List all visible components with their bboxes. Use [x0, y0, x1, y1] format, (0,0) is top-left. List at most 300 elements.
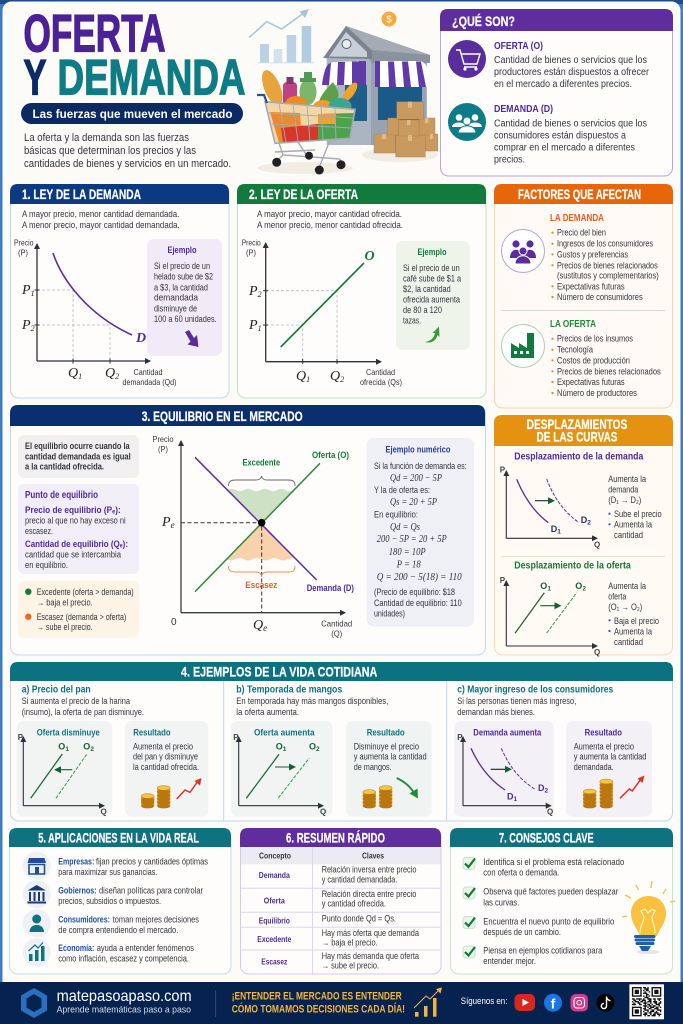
example c: c) Mayor ingreso de los consumidores — [457, 684, 613, 696]
intro text: cantidades de bienes y servicios en un mercado. — [24, 158, 231, 170]
text: supply shift effects: (O₁ → O₂) — [608, 602, 642, 612]
callout: ejemplo oferta — [396, 241, 470, 350]
summary table: Excedente — [257, 934, 291, 944]
heading: desplazamientos: DE LAS CURVAS — [536, 428, 618, 444]
chart: demand curve: P — [22, 283, 31, 298]
chart: oferta disminuye: 1 — [65, 746, 69, 753]
chart: demand shift: D — [551, 524, 557, 534]
text: oferta: Cantidad de bienes o servicios que los — [494, 55, 647, 66]
panel: 2 ley de la oferta — [237, 184, 486, 398]
summary table: Punto donde Qd = Qs. — [322, 914, 396, 924]
icon: coins — [141, 786, 170, 808]
chart: demanda aumenta: 1 — [514, 796, 518, 803]
summary table: Hay más demanda que oferta — [322, 951, 419, 961]
callout: ejemplo numerico: Qs = 20 + 5P — [390, 497, 437, 508]
chart: oferta aumenta: O — [309, 742, 316, 752]
text box: punto de equilibrio: cantidad que se intercambia — [25, 550, 121, 560]
application: consumidores: toman mejores decisiones — [113, 914, 199, 924]
factors: oferta: Expectativas futuras — [557, 377, 625, 387]
summary table — [257, 851, 419, 971]
chart: supply line: (P) — [246, 248, 256, 258]
chart: oferta aumenta: Oferta aumenta — [254, 727, 315, 738]
example b: En temporada hay más mangos disponibles, — [236, 696, 388, 706]
text: demanda — [494, 104, 647, 166]
icon: red rising arrow — [620, 776, 644, 798]
text box: punto de equilibrio: precio al que no hay exceso ni — [25, 516, 126, 526]
title: OFERTA — [24, 4, 166, 64]
text: demand shift effects: Sube el precio — [614, 509, 662, 519]
tips list: después de un cambio. — [483, 927, 561, 937]
chart: oferta disminuye: Q — [100, 807, 107, 816]
heading: 6: 6. RESUMEN RÁPIDO — [286, 829, 385, 845]
illustration: shopping cart with groceries — [257, 67, 360, 174]
summary table: Claves — [362, 851, 384, 861]
heading: 5: 5. APLICACIONES EN LA VIDA REAL — [38, 829, 199, 845]
text: demand shift effects: demanda — [608, 484, 638, 494]
summary table: Escasez — [261, 956, 287, 966]
chart: supply line: P — [249, 284, 258, 299]
logo — [21, 988, 47, 1018]
chart: supply shift: P — [500, 576, 506, 585]
callout: ejemplo numerico: Si la función de demanda es: — [374, 461, 467, 471]
heading: 4: 4. EJEMPLOS DE LA VIDA COTIDIANA — [181, 664, 377, 680]
factors: oferta: LA OFERTA — [550, 319, 596, 330]
chart: oferta aumenta: 2 — [316, 746, 320, 753]
icon: coins — [583, 779, 613, 808]
result c: Resultado — [585, 727, 622, 738]
example a: a) Precio del pan — [22, 684, 91, 696]
heading: 3: 3. EQUILIBRIO EN EL MERCADO — [142, 408, 303, 424]
chart: supply line: Precio — [242, 238, 261, 248]
callout: ejemplo oferta: tazas. — [403, 315, 421, 325]
text box: punto de equilibrio: en equilibrio. — [25, 560, 68, 570]
text: law 2 — [257, 209, 403, 230]
example b — [231, 684, 432, 817]
factors: oferta: Número de productores — [557, 388, 637, 398]
text: demanda: comprar en el mercado a diferentes — [494, 142, 635, 154]
footer — [0, 982, 683, 1024]
icon: facebook: f — [551, 996, 556, 1012]
icon: up arrow — [425, 326, 440, 343]
result b: Disminuye el precio — [354, 742, 419, 752]
text: law 1 — [22, 209, 180, 230]
illustration: store — [322, 26, 438, 162]
example c: demandan más bienes. — [457, 707, 535, 717]
example a: Si aumenta el precio de la harina — [22, 696, 130, 706]
chart: supply line: 1 — [306, 375, 310, 384]
tips list: entender mejor. — [483, 956, 536, 966]
chart: demand curve: 1 — [78, 372, 82, 381]
callout: ejemplo demanda: helado sube de $2 — [154, 272, 213, 282]
chart: demand curve: (P) — [18, 248, 28, 258]
tips list: Observa qué factores pueden desplazar — [483, 886, 618, 896]
text: supply shift effects: Baja el precio — [614, 616, 659, 626]
chart: oferta aumenta: P — [233, 733, 239, 742]
panel: 1 ley de la demanda — [10, 184, 229, 398]
chart: demand curve: Q — [68, 366, 78, 381]
application: consumidores — [23, 909, 199, 937]
chart: oferta disminuye: 2 — [90, 746, 94, 753]
factors: demanda: Expectativas futuras — [557, 281, 625, 291]
panel: 6 resumen rapido — [240, 828, 441, 974]
chart: supply line: ofrecida (Qs) — [360, 377, 402, 387]
text: demand shift effects: Aumenta la — [608, 474, 646, 484]
text box: definition — [18, 435, 139, 478]
text: demand shift effects: Aumenta la — [614, 520, 652, 530]
chart: demand curve: Cantidad — [134, 367, 163, 377]
callout: ejemplo numerico: Y la de oferta es: — [374, 485, 430, 495]
summary table: Hay más oferta que demanda — [322, 928, 419, 938]
callout: ejemplo demanda: Ejemplo — [168, 245, 197, 256]
text box: definition: El equilibrio ocurre cuando la — [25, 441, 131, 451]
icon: coins — [363, 786, 392, 808]
text: law 1: A mayor precio, menor cantidad demandada. — [22, 209, 179, 219]
callout: ejemplo demanda — [147, 239, 222, 356]
callout: ejemplo oferta: Si el precio de un — [403, 263, 460, 273]
chart: oferta disminuye: Oferta disminuye — [37, 727, 100, 738]
chart: supply line: Cantidad — [366, 367, 395, 377]
brand text — [57, 988, 192, 1016]
chart: demanda aumenta: Q — [547, 807, 553, 816]
application: gobiernos: Gobiernos: — [58, 886, 97, 896]
application: gobiernos: precios, subsidios o impuestos. — [58, 896, 161, 906]
legend: excedente y escasez: Excedente (oferta > demanda) — [37, 587, 134, 597]
chart: demand shift: Q — [594, 541, 600, 550]
callout: ejemplo numerico: (Precio de equilibrio: $18 — [374, 587, 455, 597]
result b: y aumenta la cantidad — [354, 752, 427, 762]
icon: cart — [448, 40, 486, 78]
chart: demanda aumenta: D — [507, 791, 514, 801]
callout: ejemplo numerico: En equilibrio: — [374, 510, 418, 520]
summary table: Concepto — [259, 851, 291, 861]
callout: ejemplo numerico: Qd = Qs — [390, 522, 420, 533]
callout: ejemplo numerico: 200 − 5P = 20 + 5P — [377, 534, 447, 545]
result b: de mangos. — [354, 762, 392, 772]
text: oferta: en el mercado a diferentes precios. — [494, 79, 632, 90]
chart: oferta disminuye: O — [58, 742, 65, 752]
text: demand shift effects: cantidad — [614, 530, 643, 540]
result a: del pan y disminuye — [133, 752, 198, 762]
chart: demanda aumenta — [454, 721, 554, 817]
text: demand shift effects: (D₁ → D₂) — [608, 495, 641, 505]
example c — [454, 684, 652, 817]
chart: supply line: O — [364, 249, 375, 264]
legend: excedente y escasez: → baja el precio. — [37, 598, 93, 608]
heading: 1: 1. LEY DE LA DEMANDA — [22, 186, 141, 202]
chart: demanda aumenta: Demanda aumenta — [473, 727, 542, 738]
example a: (insumo), la oferta de pan disminuye. — [22, 707, 144, 717]
subtitle pill: Las fuerzas que mueven el mercado — [32, 107, 232, 121]
text: law 2: A menor precio, menor cantidad ofrecida. — [257, 220, 403, 230]
text: oferta — [494, 41, 650, 90]
tips list: con oferta o demanda. — [483, 868, 559, 878]
application: economia: ayuda a entender fenómenos — [97, 943, 194, 953]
application: economia — [23, 938, 194, 966]
text: demanda: DEMANDA (D) — [494, 104, 553, 115]
chart: supply line: Q — [296, 369, 306, 384]
factors: demanda — [550, 213, 659, 302]
chart: demand shift — [500, 466, 600, 550]
heading: desplazamientos: DESPLAZAMIENTOS — [527, 416, 627, 432]
callout: ejemplo numerico: unidades) — [374, 608, 405, 618]
chart: demand curve: P — [22, 318, 31, 333]
text box: punto de equilibrio: escasez. — [25, 526, 53, 536]
intro text — [24, 132, 231, 170]
summary table: y cantidad ofrecida. — [322, 899, 386, 909]
callout: ejemplo numerico: Q = 200 − 5(18) = 110 — [377, 572, 462, 583]
summary table: y cantidad demandada. — [322, 874, 397, 884]
text box: punto de equilibrio: Precio de equilibrio (Pₑ): — [25, 505, 121, 515]
icon: people ring — [502, 230, 544, 272]
callout: ejemplo numerico: P = 18 — [396, 560, 421, 570]
heading: desplazamientos — [527, 416, 627, 444]
result a — [125, 721, 208, 817]
application: economia: Economía: — [58, 943, 94, 953]
chart: demand shift: P — [500, 466, 506, 475]
application: gobiernos: diseñan políticas para controlar — [99, 886, 203, 896]
chart: market equilibrium: Oferta (O) — [312, 450, 349, 461]
title — [24, 4, 246, 106]
brand text: matepasoapaso.com — [57, 988, 192, 1005]
summary table: → baja el precio. — [322, 938, 378, 948]
application: gobiernos — [23, 880, 203, 908]
chart: demand shift: 2 — [587, 520, 591, 526]
chart: demand curve: demandada (Qd) — [122, 377, 177, 387]
icon: red rising arrow — [177, 778, 202, 799]
callout: ejemplo oferta: Ejemplo — [418, 247, 447, 258]
result c: Aumenta el precio — [574, 742, 634, 752]
callout: ejemplo oferta: $2, la cantidad — [403, 284, 451, 294]
tips list: Encuentra el nuevo punto de equilibrio — [483, 916, 614, 926]
text: demanda: precios. — [494, 154, 525, 166]
chart: market equilibrium: Q — [253, 618, 263, 633]
chart: supply shift: O — [540, 581, 547, 591]
chart: oferta aumenta: O — [276, 742, 283, 752]
chart: demanda aumenta: P — [457, 733, 463, 742]
heading: 7: 7. CONSEJOS CLAVE — [499, 829, 594, 845]
text box: punto de equilibrio: Punto de equilibrio — [25, 490, 98, 501]
application: consumidores: Consumidores: — [58, 914, 110, 924]
factors: demanda: Número de consumidores — [557, 292, 643, 302]
text: supply shift effects: oferta — [608, 592, 626, 602]
text box: definition: a la cantidad ofrecida. — [25, 462, 104, 472]
slogan — [232, 990, 405, 1016]
tips list — [463, 857, 624, 966]
tips list: Identifica si el problema está relacionado — [483, 857, 624, 867]
tips list: las curvas. — [483, 898, 519, 908]
slogan: ¡ENTENDER EL MERCADO ES ENTENDER — [232, 990, 402, 1002]
icon: youtube — [514, 994, 535, 1011]
chart: demand shift: 1 — [557, 528, 561, 536]
text: oferta: productores están dispuestos a ofrecer — [494, 67, 650, 78]
chart: market equilibrium: e — [171, 520, 175, 530]
summary table: Equilibrio — [259, 916, 290, 926]
factors: oferta — [550, 319, 661, 398]
chart: market equilibrium: Cantidad — [321, 619, 352, 629]
factors: demanda: LA DEMANDA — [550, 213, 604, 224]
callout: ejemplo demanda: a $3, la cantidad — [154, 282, 208, 292]
summary table: → sube el precio. — [322, 961, 379, 971]
result b — [346, 721, 432, 817]
panel: 4 ejemplos de la vida cotidiana — [10, 662, 673, 821]
panel: que son — [440, 9, 673, 176]
callout: ejemplo numerico: 180 = 10P — [389, 547, 426, 558]
tips list: Piensa en ejemplos cotidianos para — [483, 946, 602, 956]
chart: oferta disminuye — [17, 721, 112, 817]
callout: ejemplo numerico — [367, 438, 474, 627]
chart: supply line: P — [249, 318, 258, 333]
callout: ejemplo oferta: ofrecida aumenta — [403, 294, 460, 304]
factors: demanda: Ingresos de los consumidores — [557, 239, 653, 249]
chart: supply shift: O — [575, 581, 582, 591]
qr code — [629, 984, 664, 1019]
chart: demanda aumenta: 2 — [544, 788, 548, 794]
result a: Aumenta el precio — [133, 742, 193, 752]
chart: demand curve: Precio — [14, 238, 34, 248]
text: supply shift effects — [608, 581, 659, 647]
chart: supply line: Q — [330, 369, 340, 384]
summary table: Oferta — [264, 896, 285, 906]
summary table: Relación inversa entre precio — [322, 865, 416, 875]
chart: supply line: 2 — [340, 375, 344, 384]
icon: light bulb — [622, 881, 675, 954]
result a: Resultado — [133, 727, 171, 738]
chart: supply shift — [500, 576, 600, 657]
panel: factores que afectan — [494, 184, 673, 408]
result c: demandada. — [574, 762, 614, 772]
application: empresas: fijan precios y cantidades óptimas — [96, 856, 208, 866]
chart: oferta disminuye: O — [83, 742, 90, 752]
example b: b) Temporada de mangos — [236, 684, 342, 696]
chart: demand curve: 2 — [115, 372, 119, 381]
chart: demanda aumenta: D — [538, 783, 544, 793]
chart: market equilibrium: Precio — [152, 434, 174, 444]
factors: oferta: Costos de producción — [557, 355, 630, 365]
icon: dollar coin — [382, 12, 396, 26]
text: law 2: A mayor precio, mayor cantidad ofrecida. — [257, 209, 402, 219]
chart: demand curve: D — [135, 331, 146, 346]
callout: ejemplo oferta: de 80 a 120 — [403, 305, 442, 315]
result b: Resultado — [367, 727, 405, 738]
intro text: La oferta y la demanda son las fuerzas — [24, 132, 189, 144]
text box: definition: cantidad demandada es igual — [25, 451, 131, 461]
chart: demand curve — [14, 238, 177, 387]
chart: market equilibrium — [152, 434, 354, 639]
chart: demand curve: 1 — [31, 289, 35, 298]
factors: oferta: Tecnología — [557, 345, 593, 355]
chart: supply line — [242, 238, 402, 387]
summary table: Relación directa entre precio — [322, 889, 416, 899]
chart: market equilibrium: Escasez — [245, 580, 278, 591]
chart: market equilibrium: Demanda (D) — [307, 583, 354, 594]
legend: excedente y escasez: Escasez (demanda > oferta) — [37, 612, 126, 622]
icon: facebook — [544, 994, 562, 1012]
text box: punto de equilibrio — [18, 484, 139, 574]
chart: market equilibrium: (P) — [158, 444, 168, 454]
chart: oferta aumenta — [231, 721, 333, 817]
chart: oferta disminuye: P — [18, 733, 24, 742]
icon: dollar coin: $ — [386, 14, 392, 26]
chart: demand shift: D — [581, 515, 587, 525]
title: DEMANDA — [58, 50, 246, 106]
legend: excedente y escasez: → sube el precio. — [37, 622, 93, 632]
chart: supply shift: 2 — [582, 586, 586, 592]
result c — [566, 721, 652, 817]
slogan: CÓMO TOMAMOS DECISIONES CADA DÍA! — [232, 1003, 405, 1016]
chart: market equilibrium: (Q) — [331, 629, 342, 639]
chart: market equilibrium: 0 — [171, 617, 177, 628]
application: empresas — [23, 852, 208, 880]
icon: tiktok — [596, 994, 614, 1012]
callout: ejemplo demanda: Si el precio de un — [154, 261, 210, 271]
icon: down arrow — [185, 330, 198, 347]
subheading: demanda shift: Desplazamiento de la demanda — [514, 451, 644, 462]
illustration: cardboard boxes — [374, 102, 438, 157]
chart: supply line: 2 — [258, 290, 262, 299]
chart: market equilibrium: Excedente — [242, 458, 280, 469]
icon: rising chart — [414, 988, 442, 1017]
chart: supply shift: Q — [594, 648, 600, 657]
panel: desplazamientos de las curvas — [494, 415, 673, 657]
text: oferta: OFERTA (O) — [494, 41, 543, 52]
chart: market equilibrium: e — [263, 623, 267, 633]
chart: demand curve: Q — [105, 366, 115, 381]
callout: ejemplo numerico: Cantidad de equilibrio: 110 — [374, 598, 462, 608]
text: demand shift effects — [608, 474, 662, 540]
factors: demanda: Precios de bienes relacionados — [557, 260, 658, 270]
callout: ejemplo demanda: 100 a 60 unidades. — [154, 314, 217, 324]
text: supply shift effects: cantidad — [614, 637, 643, 647]
callout: ejemplo oferta: café sube de $1 a — [403, 274, 461, 284]
chart: supply shift: 1 — [547, 586, 551, 592]
application: empresas: para maximizar sus ganancias. — [58, 867, 157, 877]
example a — [17, 684, 208, 817]
legend: excedente y escasez — [18, 581, 139, 638]
chart: oferta aumenta: Q — [320, 807, 326, 816]
brand text: Aprende matemáticas paso a paso — [57, 1005, 191, 1016]
callout: ejemplo demanda: demandada — [154, 293, 198, 303]
icon: instagram — [570, 994, 588, 1012]
callout: ejemplo demanda: disminuye de — [154, 303, 197, 313]
social label: Síguenos en: — [461, 996, 507, 1007]
chart: supply line: 1 — [258, 324, 262, 333]
heading: que son: ¿QUÉ SON? — [452, 13, 515, 29]
text: demanda: Cantidad de bienes o servicios que los — [494, 118, 647, 130]
title: Y — [24, 50, 46, 106]
application: consumidores: de compra entendiendo el mercado. — [58, 925, 178, 935]
icon: people — [448, 103, 486, 141]
panel: 5 aplicaciones en la vida real — [9, 828, 231, 974]
chart: market equilibrium: P — [162, 515, 171, 530]
subtitle pill — [21, 103, 243, 124]
heading: 2: 2. LEY DE LA OFERTA — [249, 186, 358, 202]
icon: green falling arrow — [397, 778, 418, 798]
factors: demanda: Gustos y preferencias — [557, 249, 628, 259]
text: supply shift effects: Aumenta la — [608, 581, 646, 591]
summary table: Demanda — [259, 870, 290, 880]
chart: demand curve: 2 — [31, 324, 35, 333]
illustration: bar chart with rising arrow — [249, 9, 314, 63]
icon: factory ring — [502, 324, 544, 368]
chart: oferta aumenta: 1 — [283, 746, 287, 753]
text: demanda: consumidores están dispuestos a — [494, 130, 626, 142]
factors: oferta: Precios de los insumos — [557, 334, 633, 344]
result c: y aumenta la cantidad — [574, 752, 646, 762]
callout: ejemplo numerico: Ejemplo numérico — [386, 445, 451, 456]
text box: punto de equilibrio: Cantidad de equilibrio (Qₑ): — [25, 539, 128, 549]
subheading: oferta shift: Desplazamiento de la oferta — [514, 561, 631, 572]
callout: ejemplo numerico: Qd = 200 − 5P — [390, 473, 442, 484]
